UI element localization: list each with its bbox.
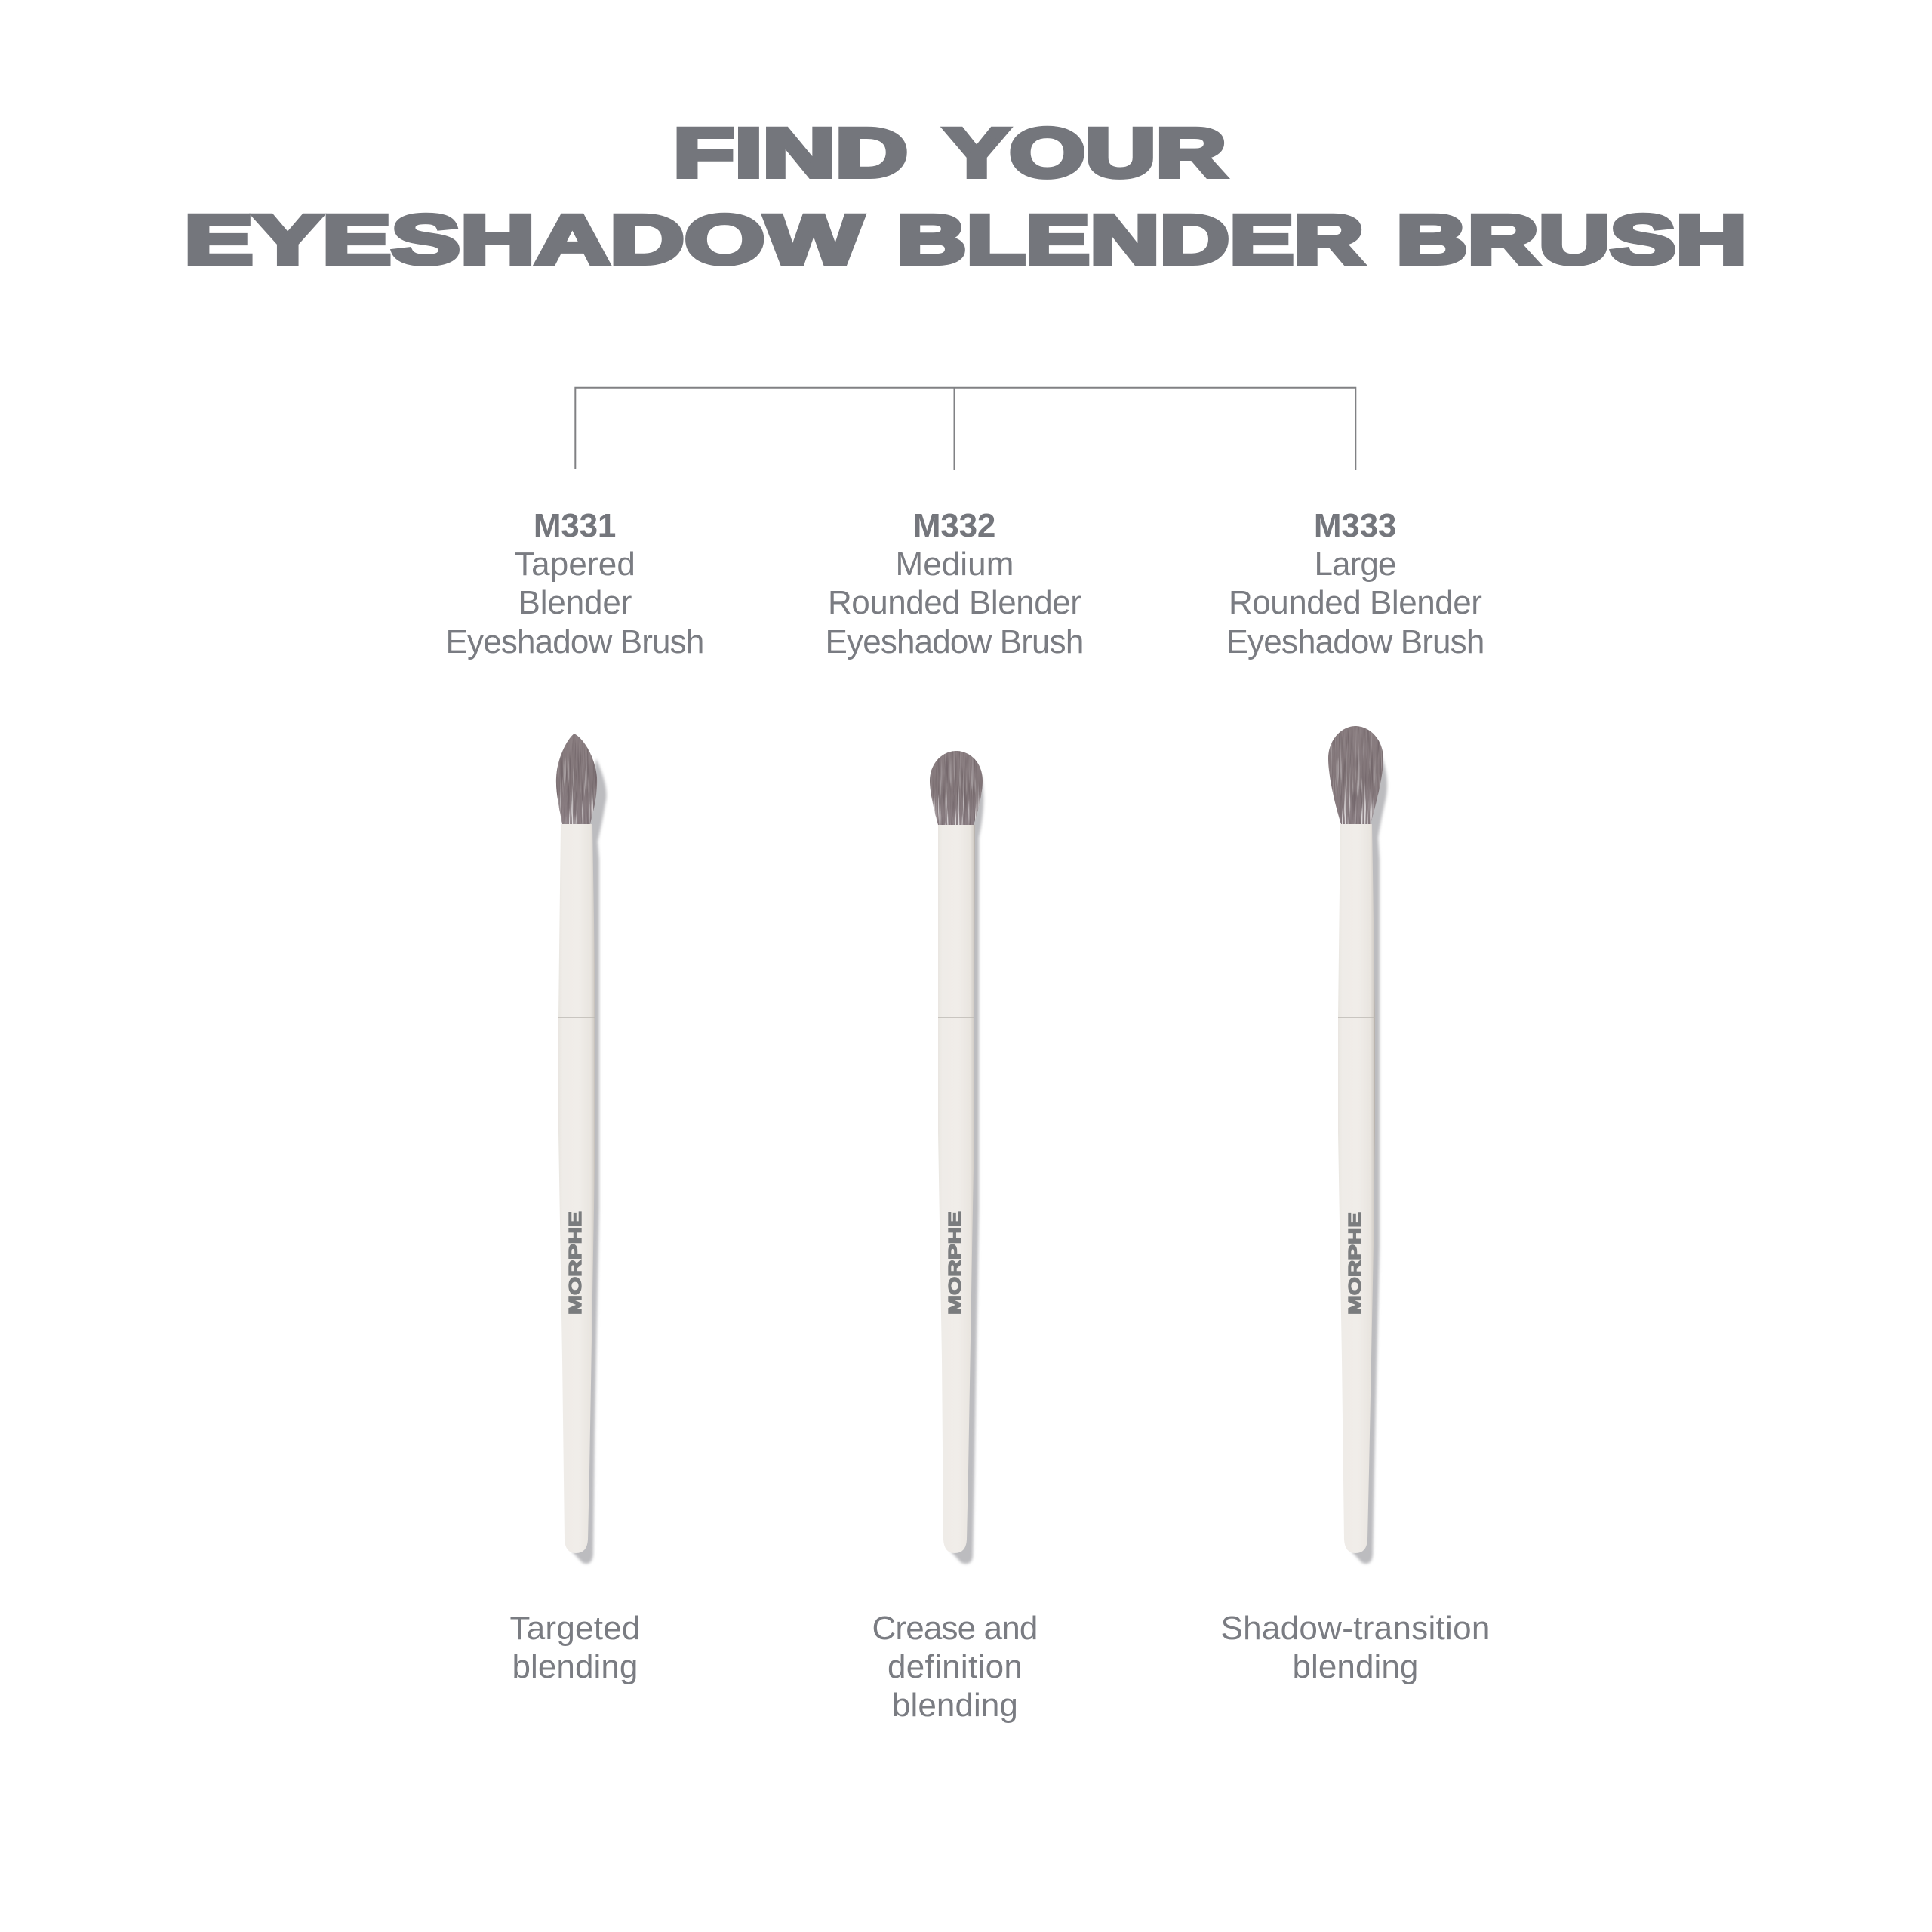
label: M333: M333 — [1314, 507, 1396, 544]
label: M333 — [1226, 507, 1484, 660]
brush: M331: MORPHE — [565, 1211, 585, 1315]
caption: M332 use: Crease and — [872, 1610, 1037, 1647]
bristles — [556, 734, 597, 824]
bristles — [930, 751, 983, 825]
title: EYESHADOW — [184, 202, 863, 278]
label: M332: M332 — [913, 507, 995, 544]
label: M331: Blender — [518, 584, 632, 621]
caption: M331 use: blending — [512, 1648, 637, 1685]
label: M332: Rounded Blender — [828, 584, 1081, 621]
label: M331: Tapered — [515, 546, 635, 583]
label: M331 — [446, 507, 703, 660]
brush: M332: MORPHE — [945, 1211, 964, 1315]
label: M332: Eyeshadow Brush — [826, 623, 1083, 660]
label: M332 — [826, 507, 1083, 660]
label: M331: Eyeshadow Brush — [446, 623, 703, 660]
caption: M331 use: Targeted — [510, 1610, 640, 1647]
caption: M333 use: Shadow-transition — [1221, 1610, 1490, 1647]
label: M332: Medium — [895, 546, 1013, 583]
label: M331: M331 — [534, 507, 616, 544]
caption: M331 use — [510, 1610, 640, 1685]
caption: M332 use: blending — [892, 1687, 1017, 1724]
caption: M333 use — [1221, 1610, 1490, 1685]
brush: M333: MORPHE — [1345, 1212, 1364, 1315]
brush: M332 — [930, 751, 983, 1564]
caption: M332 use — [872, 1610, 1037, 1724]
title: FIND — [673, 115, 908, 192]
bristles — [1328, 726, 1383, 824]
title: BRUSH — [1396, 202, 1747, 278]
caption: M332 use: definition — [888, 1648, 1022, 1685]
title — [184, 115, 1747, 278]
label: M333: Eyeshadow Brush — [1226, 623, 1484, 660]
brush: M333 — [1328, 726, 1387, 1564]
title: YOUR — [944, 115, 1226, 192]
caption: M333 use: blending — [1292, 1648, 1417, 1685]
label: M333: Rounded Blender — [1229, 584, 1481, 621]
brush: M331 — [556, 734, 607, 1564]
bracket connector — [575, 388, 1355, 470]
title: BLENDER — [897, 202, 1364, 278]
label: M333: Large — [1315, 546, 1396, 583]
